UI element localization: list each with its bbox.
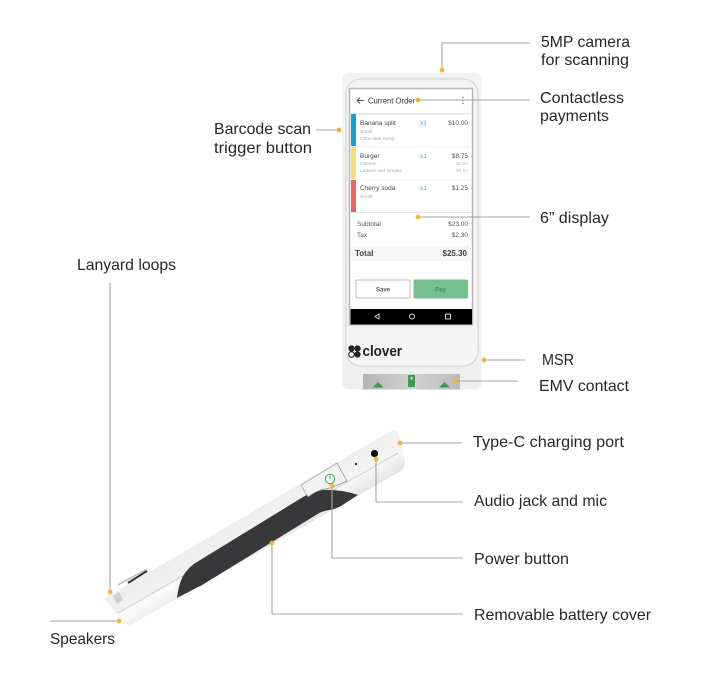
clover logo: clover [362,344,402,360]
pay button: Pay [435,288,446,294]
order item: burger: Lettuce and tomato [360,168,401,174]
device outer body [342,73,482,390]
callout: removable battery cover: Removable battery cover [474,607,652,624]
callout: 6 inch display [416,210,609,227]
order totals: $25.30 [443,249,468,258]
order item: cherry soda [351,180,472,213]
order totals [351,221,472,261]
battery cover grip [177,490,358,598]
front view of device [342,73,482,390]
microphone hole [355,463,357,465]
callout: 5MP camera [440,34,630,72]
order item: burger: Cheese [360,161,377,167]
side view of device [105,431,405,625]
speaker grille [113,592,123,604]
android navigation bar [350,309,472,324]
audio jack [371,450,378,457]
callout: Type-C charging port: Type-C charging port [473,434,625,451]
pay button [414,280,468,298]
order item: cherry soda: x1 [420,185,427,192]
callout: 6 inch display: 6” display [540,210,609,227]
callout: EMV contact: EMV contact [539,378,630,395]
order item: burger: $8.75 [452,153,468,160]
order item: banana split [351,114,468,146]
order item: burger [351,146,472,179]
callout: audio jack and mic: Audio jack and mic [474,493,607,510]
callout: 5MP camera: 5MP camera [541,34,630,51]
callout: audio jack and mic [374,457,607,510]
lower body shade [118,453,405,625]
save button: Save [376,288,391,294]
order item: banana split: x1 [420,120,427,127]
order totals: $23.00 [448,221,468,228]
callout: 5MP camera: for scanning [541,52,629,69]
order totals: Tax [357,232,368,239]
callout: Type-C charging port [398,434,625,451]
lanyard slot [118,569,147,585]
callout: MSR: MSR [542,352,574,369]
order item: cherry soda: Small [360,194,372,200]
order totals: Subtotal [357,221,381,228]
callout: speakers: Speakers [50,631,115,648]
order totals: $2.30 [452,232,468,239]
callout: contactless payments: payments [540,108,609,125]
side body [105,431,405,625]
callout: speakers [50,619,121,648]
EMV contact strip [363,374,460,390]
callout: removable battery cover [270,541,652,624]
order item: banana split: Small [360,129,372,135]
callout: barcode scan trigger button: trigger button [214,140,312,157]
callout: power button: Power button [474,551,569,568]
order item: banana split: Banana split [360,120,396,127]
app header: Current Order [368,96,415,106]
order item: banana split: Chocolate syrup [360,136,395,142]
order item: burger: Burger [360,153,380,160]
callout: lanyard loops [77,257,176,594]
save button [356,280,410,298]
order item: burger: $0.50 [456,168,468,174]
callout: contactless payments: Contactless [540,90,624,107]
screen [350,88,472,324]
icon: power button [325,474,335,484]
order item: cherry soda: $1.25 [452,185,468,192]
callout: EMV contact [453,378,630,395]
app header [351,96,472,114]
device inner bezel [346,79,478,366]
power button panel [301,463,347,497]
callout: MSR [482,352,574,369]
callout: power button [330,484,569,568]
callout: barcode scan trigger button [214,121,341,157]
callout: contactless payments [416,90,624,125]
order item: burger: $0.50 [456,161,468,167]
order item: burger: x1 [420,153,427,160]
order totals: Total [355,249,374,258]
order item: cherry soda: Cherry soda [360,185,396,192]
order item: banana split: $10.00 [448,120,468,127]
callout: lanyard loops: Lanyard loops [77,257,176,274]
callout: barcode scan trigger button: Barcode scan [214,121,311,138]
